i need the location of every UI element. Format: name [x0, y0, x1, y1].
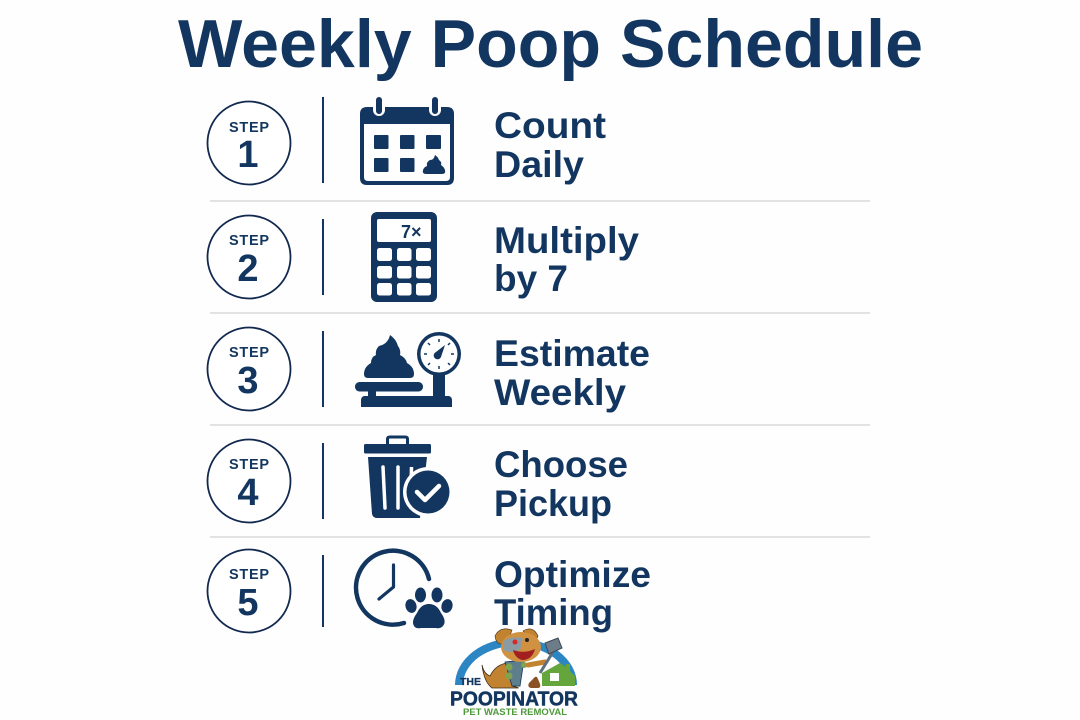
- logo house: [542, 663, 575, 686]
- logo: The Poopinator: POOPINATOR: [450, 688, 578, 710]
- icon: trash can with check mark: [364, 437, 453, 518]
- label: Multiply by 7: Multiply: [494, 220, 639, 261]
- logo text: THE: [460, 676, 481, 688]
- step 3 row: [208, 328, 650, 413]
- label: Count Daily: Daily: [494, 144, 584, 185]
- step 3 badge: [208, 328, 290, 410]
- label: Optimize Timing: Optimize: [494, 554, 651, 595]
- icon: calculator: [371, 212, 437, 302]
- step 2 badge: STEP: [229, 233, 269, 249]
- logo: The Poopinator: PET WASTE REMOVAL: [463, 707, 568, 717]
- label: Count Daily: Count: [494, 105, 606, 146]
- icon: calculator: 7×: [401, 222, 422, 242]
- step 1 badge: 1: [237, 134, 259, 176]
- step 4 badge: 4: [237, 472, 259, 514]
- label: Optimize Timing: Timing: [494, 592, 613, 633]
- step 2 row: [208, 212, 639, 302]
- label: Multiply by 7: [494, 220, 639, 299]
- label: Multiply by 7: by 7: [494, 258, 568, 299]
- step 5 row: [208, 550, 651, 633]
- step 1 badge: STEP: [229, 120, 269, 136]
- label: Optimize Timing: [494, 554, 651, 633]
- logo dog: [482, 629, 562, 688]
- title: Weekly Poop Schedule: [178, 6, 923, 82]
- step 5 badge: STEP: [229, 567, 269, 583]
- step 3 badge: STEP: [229, 345, 269, 361]
- label: Choose Pickup: Pickup: [494, 483, 612, 524]
- step 5 badge: [208, 550, 290, 632]
- logo: The Poopinator: [450, 629, 578, 717]
- step 3 badge: 3: [237, 360, 259, 402]
- step 5 badge: 5: [237, 582, 259, 624]
- step 2 badge: 2: [237, 248, 259, 290]
- step 4 badge: STEP: [229, 457, 269, 473]
- icon: calendar with poop: [360, 97, 454, 185]
- label: Estimate Weekly: Weekly: [494, 372, 626, 413]
- label: Choose Pickup: [494, 444, 628, 524]
- logo poop: [528, 677, 540, 688]
- step 1 badge: [208, 102, 290, 184]
- step 1 row: [208, 97, 606, 185]
- label: Choose Pickup: Choose: [494, 444, 628, 485]
- step 4 row: [208, 437, 628, 524]
- label: Estimate Weekly: Estimate: [494, 333, 650, 374]
- label: Count Daily: [494, 105, 606, 185]
- icon: clock with paw print: [356, 551, 454, 628]
- logo arc: [455, 638, 577, 685]
- step 2 badge: [208, 216, 290, 298]
- icon: poop on weighing scale: [355, 332, 461, 407]
- label: Estimate Weekly: [494, 333, 650, 413]
- step 4 badge: [208, 440, 290, 522]
